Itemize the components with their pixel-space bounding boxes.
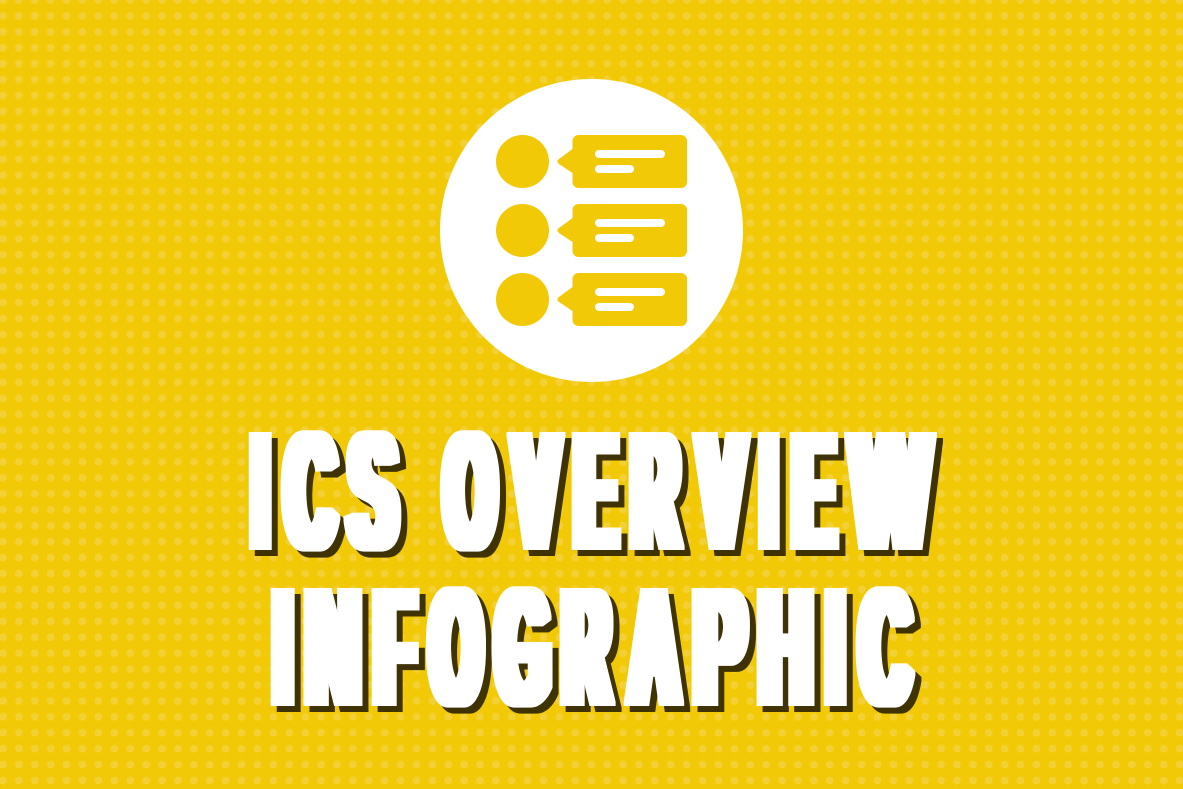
title line 1: W: [852, 399, 930, 584]
title line 2: P: [694, 555, 744, 740]
title line 1: O: [445, 399, 495, 584]
icon row 2: dot and speech bubble: [496, 204, 687, 257]
icon row 1: dot and speech bubble: [496, 135, 687, 188]
title line 2: R: [563, 555, 609, 740]
title line 2: C: [861, 555, 909, 740]
icon row 3: dot and speech bubble: [496, 273, 687, 326]
title line 1: E: [794, 399, 834, 584]
title line 1: I: [763, 399, 774, 584]
title line 2: O: [431, 555, 481, 740]
title line 1: I: [254, 399, 267, 584]
icon: white circle with list of speech bubbles: [440, 79, 743, 382]
title line 1: S: [349, 399, 396, 584]
title line 2: A: [630, 555, 678, 740]
title line 2: G: [497, 555, 549, 740]
title: [254, 399, 930, 740]
title line 2: I: [275, 555, 290, 740]
title line 2: N: [307, 555, 359, 740]
title line 2: I: [828, 555, 842, 740]
title line 1: E: [576, 399, 616, 584]
title line 2: H: [760, 555, 811, 740]
title line 1: C: [286, 399, 334, 584]
title line 1: R: [632, 399, 678, 584]
title line 1: V: [699, 399, 744, 584]
title line 1: V: [514, 399, 558, 584]
title line 2: F: [375, 555, 414, 740]
